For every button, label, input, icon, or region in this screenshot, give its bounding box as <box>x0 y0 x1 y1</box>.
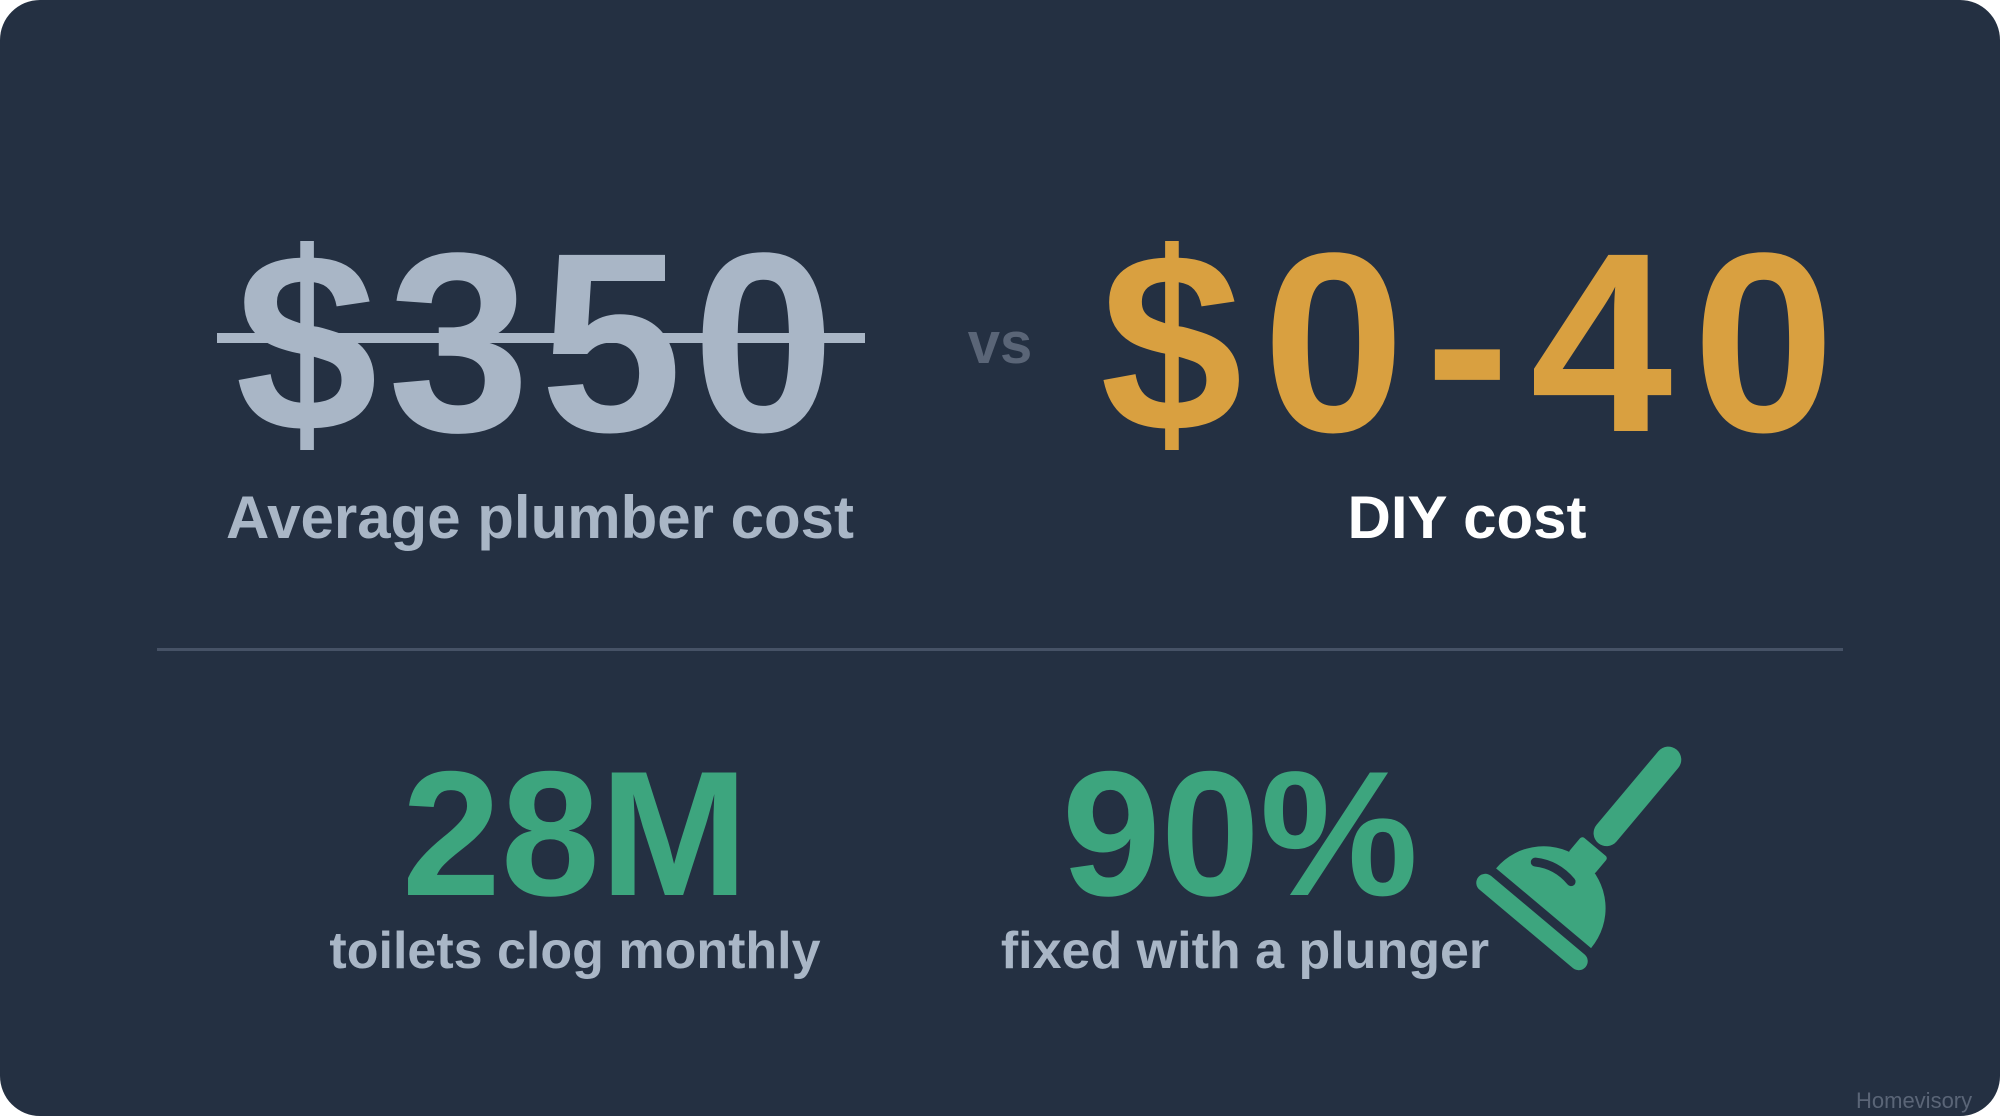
big price: plumber: $350 <box>235 200 845 486</box>
watermark: Homevisory: Homevisory <box>1856 1088 1972 1113</box>
label: DIY cost: DIY cost <box>1348 484 1586 551</box>
stat: 90%: 90% <box>1062 734 1418 933</box>
stat: 28M: 28M <box>402 734 748 933</box>
stat label: toilets clog monthly: toilets clog monthly <box>329 922 821 980</box>
stat label: fixed with a plunger: fixed with a plunger <box>1001 922 1489 980</box>
label: average plumber cost: Average plumber cost <box>226 484 854 551</box>
vs label: vs <box>968 311 1032 376</box>
big price: DIY: $0-40 <box>1100 200 1855 486</box>
strikethrough line <box>217 333 865 343</box>
